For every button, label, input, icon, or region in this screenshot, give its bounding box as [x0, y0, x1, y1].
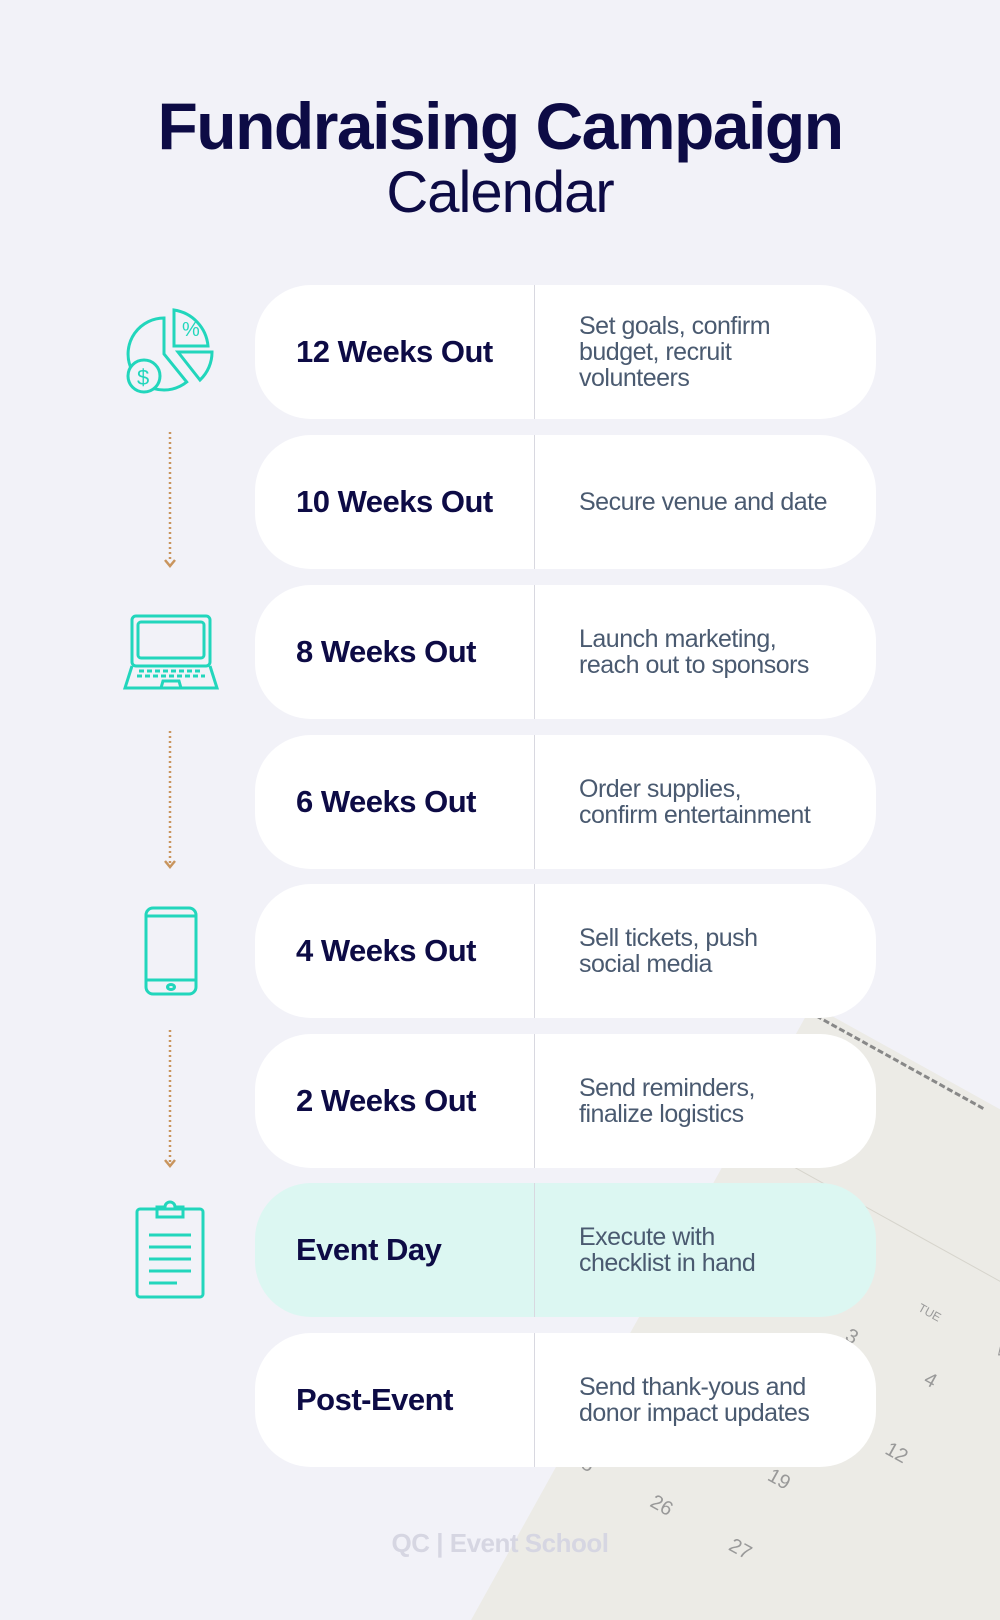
- row: 2 weeks: Send reminders,: [579, 1074, 755, 1102]
- icon: pie chart with dollar: [126, 308, 214, 394]
- row: 6 weeks: Order supplies,: [579, 775, 741, 803]
- row: 8 weeks: Launch marketing,: [579, 625, 776, 653]
- row: post-event: [255, 1333, 876, 1467]
- row: 12 weeks: budget, recruit: [579, 338, 731, 366]
- row: 2 weeks: [255, 1034, 876, 1168]
- row: event day (highlighted): Execute with: [579, 1223, 715, 1251]
- row: 12 weeks: [255, 285, 876, 419]
- background calendar photo: 25: [568, 1447, 598, 1477]
- row: 2 weeks: 2 Weeks Out: [296, 1083, 476, 1118]
- row: 10 weeks: [255, 435, 876, 569]
- icon: tablet: [144, 906, 198, 996]
- row: 2 weeks: finalize logistics: [579, 1100, 744, 1128]
- arrow 2: [164, 731, 176, 869]
- row: 8 weeks: 8 Weeks Out: [296, 634, 476, 669]
- title: Fundraising Campaign: [157, 89, 843, 163]
- background calendar photo: 11: [803, 1394, 832, 1424]
- row: 12 weeks: 12 Weeks Out: [296, 334, 493, 369]
- background calendar photo: SUN: [758, 1213, 787, 1238]
- icon: pie chart with dollar: %: [182, 319, 200, 341]
- row: event day (highlighted): Event Day: [296, 1232, 441, 1267]
- background calendar photo: MON: [837, 1257, 868, 1283]
- background calendar photo: 3: [841, 1325, 862, 1349]
- background calendar photo: 12: [881, 1438, 912, 1468]
- logo: QC | Event School: [392, 1528, 608, 1558]
- row: 8 weeks: reach out to sponsors: [579, 651, 809, 679]
- arrow 1: [164, 432, 176, 568]
- row: 8 weeks: [255, 585, 876, 719]
- row: 12 weeks: volunteers: [579, 364, 689, 392]
- row: 10 weeks: Secure venue and date: [579, 488, 827, 516]
- background calendar photo: 19: [764, 1464, 794, 1494]
- row: 4 weeks: [255, 884, 876, 1018]
- row: post-event: Send thank-yous and: [579, 1373, 806, 1401]
- row: 4 weeks: social media: [579, 950, 712, 978]
- background calendar photo: 10: [724, 1351, 754, 1381]
- background calendar photo: 27: [725, 1534, 755, 1564]
- row: post-event: Post-Event: [296, 1382, 453, 1417]
- row: 4 weeks: Sell tickets, push: [579, 924, 758, 952]
- background calendar photo: 26: [646, 1491, 677, 1521]
- row: post-event: donor impact updates: [579, 1399, 809, 1427]
- row: 6 weeks: [255, 735, 876, 869]
- icon: pie chart with dollar: $: [137, 365, 149, 390]
- subtitle: Calendar: [386, 160, 614, 225]
- icon: clipboard: [136, 1200, 204, 1298]
- background calendar photo: 4: [920, 1368, 941, 1393]
- icon: laptop: [123, 614, 219, 690]
- row: 6 weeks: confirm entertainment: [579, 801, 810, 829]
- row: 4 weeks: 4 Weeks Out: [296, 933, 476, 968]
- row: event day (highlighted): checklist in hand: [579, 1249, 755, 1277]
- background calendar photo: 18: [685, 1421, 715, 1451]
- arrow 3: [164, 1030, 176, 1168]
- row: 12 weeks: Set goals, confirm: [579, 312, 770, 340]
- background calendar photo: TUE: [916, 1301, 944, 1325]
- row: 6 weeks: 6 Weeks Out: [296, 784, 476, 819]
- row: event day (highlighted): [255, 1183, 876, 1317]
- row: 10 weeks: 10 Weeks Out: [296, 484, 493, 519]
